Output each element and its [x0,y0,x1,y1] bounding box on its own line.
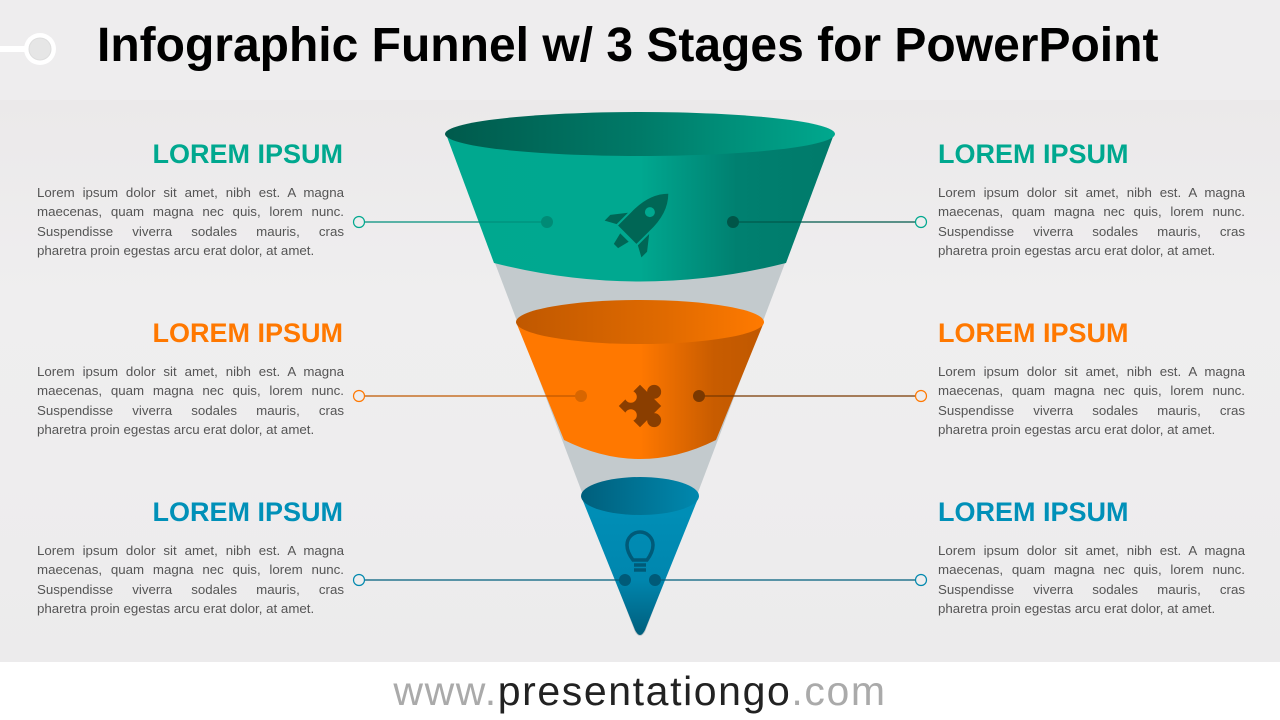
left text 3: LOREM IPSUM [152,497,343,527]
text: maecenas, quam magna nec quis, lorem nunc. [938,383,1245,398]
text: Lorem ipsum dolor sit amet, nibh est. A magna [37,543,344,558]
icon: puzzle [613,373,678,439]
connectors [354,216,926,586]
text: Suspendisse viverra sodales mauris, cras [37,403,344,418]
text: pharetra proin egestas arcu erat dolor, at amet. [37,422,314,437]
text: maecenas, quam magna nec quis, lorem nunc. [938,562,1245,577]
text: Suspendisse viverra sodales mauris, cras [938,582,1245,597]
right text 1: LOREM IPSUM [938,139,1129,169]
text: Lorem ipsum dolor sit amet, nibh est. A magna [37,185,344,200]
text: Lorem ipsum dolor sit amet, nibh est. A magna [938,364,1245,379]
text: pharetra proin egestas arcu erat dolor, at amet. [37,601,314,616]
text: maecenas, quam magna nec quis, lorem nunc. [938,204,1245,219]
text: maecenas, quam magna nec quis, lorem nunc. [37,204,344,219]
text: maecenas, quam magna nec quis, lorem nunc. [37,383,344,398]
text: maecenas, quam magna nec quis, lorem nunc. [37,562,344,577]
icon: rocket [598,175,687,264]
text: Suspendisse viverra sodales mauris, cras [37,582,344,597]
text: Lorem ipsum dolor sit amet, nibh est. A magna [938,185,1245,200]
text: pharetra proin egestas arcu erat dolor, at amet. [37,243,314,258]
teal band [445,112,835,282]
text: Lorem ipsum dolor sit amet, nibh est. A magna [938,543,1245,558]
right text 3: LOREM IPSUM [938,497,1129,527]
text: pharetra proin egestas arcu erat dolor, at amet. [938,422,1215,437]
text: Lorem ipsum dolor sit amet, nibh est. A magna [37,364,344,379]
text: pharetra proin egestas arcu erat dolor, at amet. [938,601,1215,616]
text: Suspendisse viverra sodales mauris, cras [938,403,1245,418]
blue cone [581,477,699,635]
grey cone [446,134,834,636]
left text 2: LOREM IPSUM [152,318,343,348]
footer: www.presentationgo.com [393,668,887,714]
right text 2: LOREM IPSUM [938,318,1129,348]
background bands [0,100,1280,662]
text: Suspendisse viverra sodales mauris, cras [37,224,344,239]
footer [0,662,1280,720]
text: pharetra proin egestas arcu erat dolor, at amet. [938,243,1215,258]
title: Infographic Funnel w/ 3 Stages for PowerPoint [97,19,1158,72]
text: Suspendisse viverra sodales mauris, cras [938,224,1245,239]
left text 1: LOREM IPSUM [152,139,343,169]
icon: bulb [627,532,653,570]
orange band [516,300,764,459]
logo icon [0,33,56,65]
